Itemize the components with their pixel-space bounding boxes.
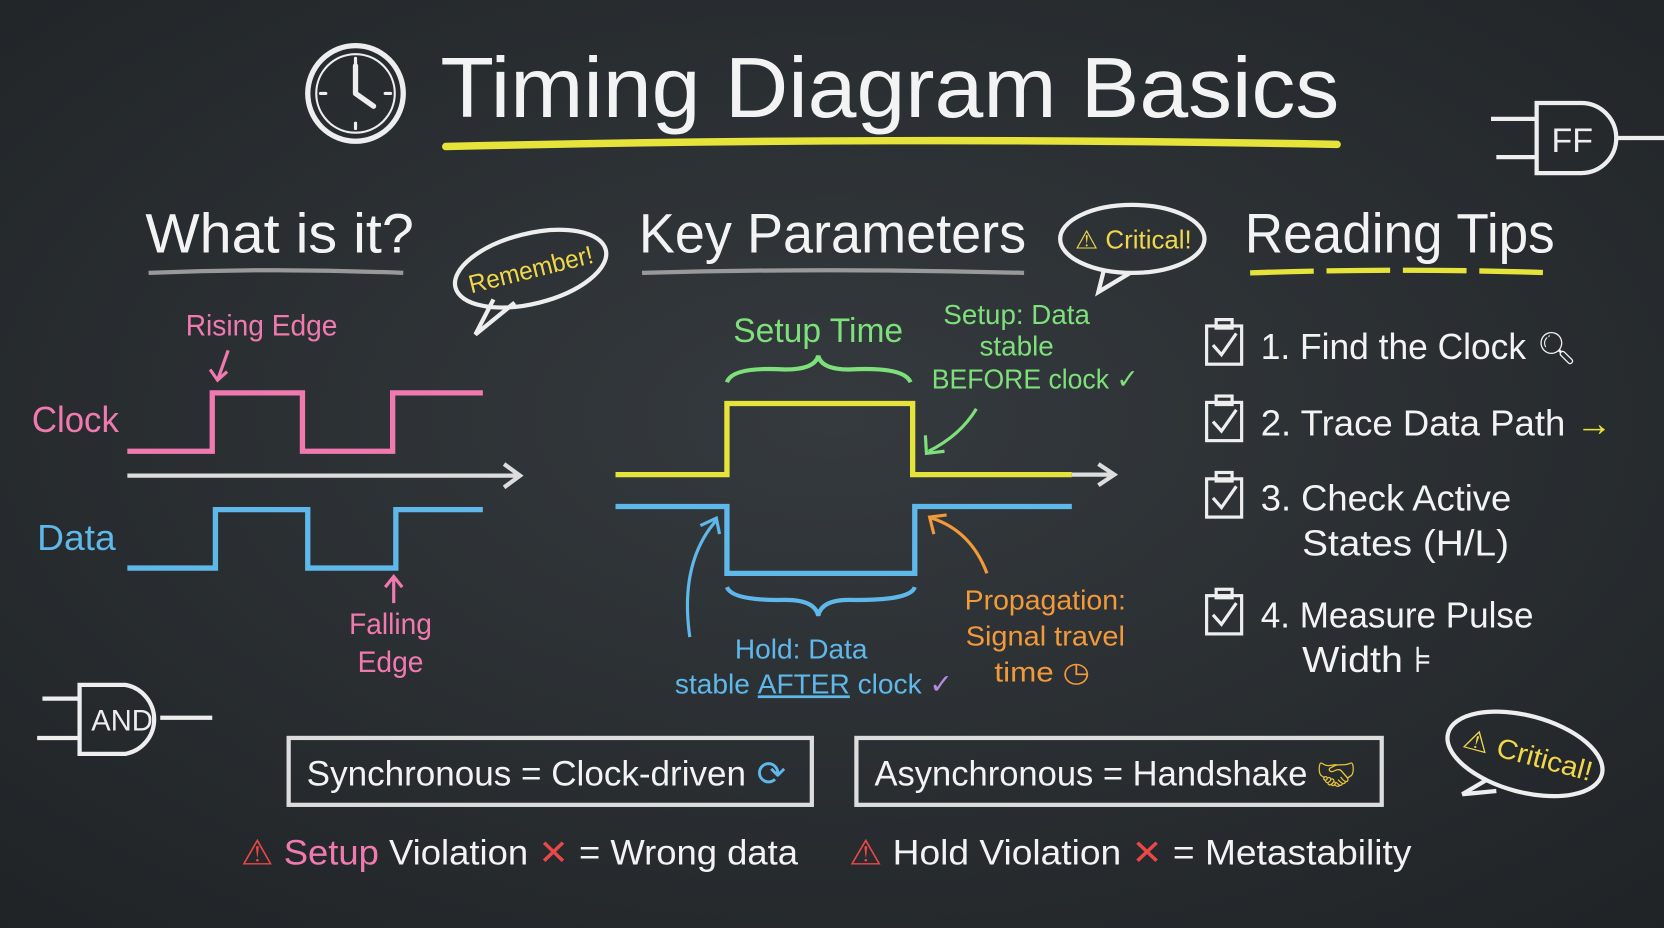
box: synchronous: ⟳ xyxy=(757,755,786,794)
diagram: setup/hold timing: Signal travel xyxy=(966,621,1125,652)
heading: Key Parameters: Key Parameters xyxy=(639,203,1026,265)
callout: Remember! xyxy=(447,216,614,334)
icon: clock xyxy=(308,46,403,141)
icon: FF gate: FF xyxy=(1552,122,1593,160)
diagram: setup/hold timing: BEFORE clock ✓ xyxy=(932,364,1139,395)
title: Timing Diagram Basics xyxy=(440,40,1339,135)
list: reading tips: 4. Measure Pulse xyxy=(1261,595,1533,636)
diagram: setup/hold timing: Setup: Data xyxy=(943,299,1091,330)
list: reading tips: → xyxy=(1576,402,1612,443)
callout: Critical bottom xyxy=(1438,696,1612,811)
heading: Reading Tips: Reading Tips xyxy=(1245,203,1555,265)
heading: What is it?: What is it? xyxy=(145,203,414,265)
callout: Remember!: Remember! xyxy=(466,241,596,299)
list: reading tips: States (H/L) xyxy=(1302,522,1509,563)
box: asynchronous: Asynchronous = Handshake xyxy=(874,755,1307,794)
box: asynchronous xyxy=(856,738,1382,805)
diagram: setup/hold timing xyxy=(616,299,1139,699)
box: synchronous xyxy=(289,738,812,805)
list: reading tips: 3. Check Active xyxy=(1261,478,1511,519)
warnings: ⚠ Hold Violation ✕ = Metastability xyxy=(849,833,1412,872)
list: reading tips: 🔍︎ xyxy=(1537,330,1577,366)
diagram: setup/hold timing: time ◷ xyxy=(994,657,1090,688)
list: reading tips: 1. Find the Clock xyxy=(1261,326,1527,367)
warnings xyxy=(241,833,1412,872)
icon: AND gate: AND xyxy=(91,705,153,738)
icon: AND gate xyxy=(37,685,212,754)
diagram: clock and data waveforms: Clock xyxy=(32,399,120,440)
diagram: setup/hold timing: Propagation: xyxy=(965,584,1126,615)
diagram: setup/hold timing: stable AFTER clock ✓ xyxy=(675,668,953,699)
box: asynchronous: 🤝︎ xyxy=(1316,757,1356,793)
warnings: ⚠ Setup Violation ✕ = Wrong data xyxy=(241,833,799,872)
diagram: setup/hold timing: stable xyxy=(980,331,1054,362)
list: reading tips: 2. Trace Data Path xyxy=(1261,402,1565,443)
diagram: clock and data waveforms xyxy=(32,310,520,679)
diagram: setup/hold timing: Setup Time xyxy=(733,312,903,350)
diagram: setup/hold timing: Hold: Data xyxy=(735,633,868,664)
list: reading tips: ⊧ xyxy=(1414,639,1432,680)
callout: Critical top xyxy=(1060,205,1204,292)
box: synchronous: Synchronous = Clock-driven xyxy=(307,755,746,794)
icon: FF gate xyxy=(1491,103,1664,173)
list: reading tips: Width xyxy=(1302,639,1403,680)
list: reading tips xyxy=(1207,320,1612,680)
callout: Critical top: ⚠ Critical! xyxy=(1075,226,1192,254)
callout: Critical bottom: ⚠ Critical! xyxy=(1460,723,1596,787)
diagram: clock and data waveforms: Edge xyxy=(358,646,423,679)
diagram: clock and data waveforms: Falling xyxy=(349,608,432,641)
diagram: clock and data waveforms: Data xyxy=(37,517,117,558)
diagram: clock and data waveforms: Rising Edge xyxy=(186,310,337,343)
